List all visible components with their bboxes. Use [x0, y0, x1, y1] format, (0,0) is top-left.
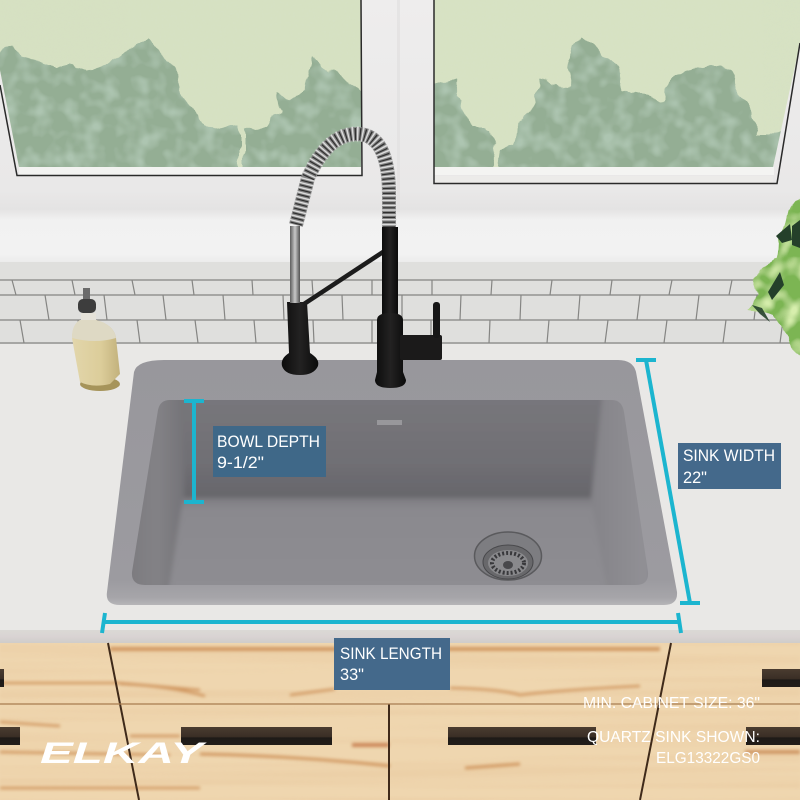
label: sink length: [334, 638, 450, 690]
sink bowl left wall: [132, 400, 187, 585]
sink bowl right wall: [590, 395, 660, 595]
faucet main column: [382, 227, 398, 319]
cabinet seams: [108, 643, 671, 800]
faucet side sprayer base: [282, 302, 318, 375]
countertop: [0, 344, 800, 632]
subway tile backsplash: [0, 280, 800, 344]
soap bottle: [72, 288, 120, 391]
plant: [749, 197, 800, 360]
sink rim: [107, 360, 677, 605]
dimension: bowl depth: [184, 400, 204, 502]
bushes left: [0, 38, 361, 167]
logo: Elkay: ELKAY: [40, 737, 208, 770]
cabinet handles: [0, 669, 800, 745]
sink bowl floor: [170, 500, 606, 585]
label: sink width: [678, 443, 781, 489]
bushes right: [430, 38, 785, 175]
label: bowl depth: [213, 426, 326, 477]
countertop front edge: [0, 630, 800, 643]
text: cabinet and model details: QUARTZ SINK SHOWN:: [587, 729, 760, 746]
sink: [107, 360, 677, 605]
wall band above tiles: [0, 262, 800, 282]
faucet lower hose: [290, 226, 300, 303]
label: bowl depth: 9-1/2": [217, 453, 264, 472]
cabinets: [0, 643, 800, 800]
dimension: sink length: [102, 613, 681, 633]
wood grain streaks: [0, 649, 800, 788]
label: sink length: SINK LENGTH: [340, 644, 442, 663]
label: sink length: 33": [340, 665, 364, 684]
brand plate: [377, 420, 402, 425]
faucet spring coil: [296, 134, 389, 230]
label: bowl depth: BOWL DEPTH: [217, 432, 320, 451]
window: left pane: [0, 0, 370, 176]
faucet handle: [400, 335, 442, 360]
text: cabinet and model details: MIN. CABINET SIZE: 36": [583, 695, 760, 712]
dimension: sink width: [636, 360, 700, 603]
label: sink width: 22": [683, 468, 707, 487]
window: right pane: [430, 0, 800, 184]
text: cabinet and model details: [583, 695, 760, 767]
faucet diagonal arm: [304, 250, 386, 304]
sink bowl back wall: [184, 390, 603, 500]
label: sink width: SINK WIDTH: [683, 446, 775, 465]
drain: [474, 532, 542, 580]
window mullion seam: [397, 0, 400, 212]
sink bowl interior: [132, 400, 648, 585]
faucet: [282, 134, 442, 388]
text: cabinet and model details: ELG13322GS0: [656, 750, 760, 767]
background wall and window frame: [0, 0, 800, 265]
